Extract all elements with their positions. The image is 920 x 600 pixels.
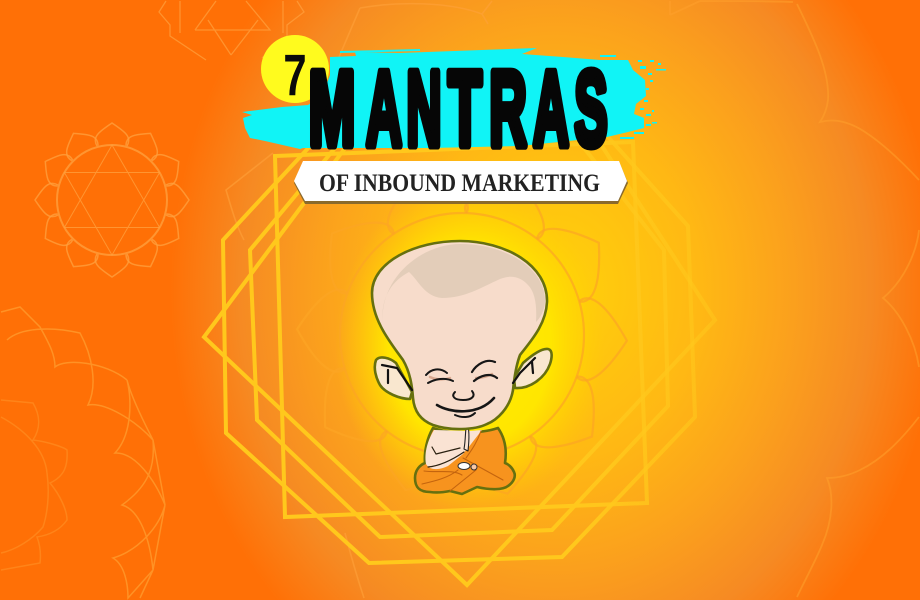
title brush stroke [242,48,666,149]
monk face [426,361,497,417]
background: large lotus lower left [1,307,165,598]
monk character [372,241,552,494]
monk head [372,241,547,429]
title MANTRAS: S [574,49,608,168]
scalp shading [382,244,545,325]
title MANTRAS: N [406,50,442,168]
central glow [335,180,605,510]
title MANTRAS: M [309,49,355,167]
background: chakra mandala left [35,123,189,277]
background: chakra mandala top [159,1,304,60]
badge circle with number 7: 7 [283,42,307,108]
badge circle with number 7 [261,35,329,108]
title MANTRAS: A [533,49,569,168]
monk right ear [514,349,552,388]
monk robe and legs [415,423,515,494]
title MANTRAS: A [366,49,402,168]
title MANTRAS: T [448,50,482,168]
background: large faint lotus right [670,1,919,597]
subtitle ribbon [294,161,628,204]
central lotus mandala [296,165,628,505]
subtitle ribbon: OF INBOUND MARKETING [319,170,600,197]
title MANTRAS [309,48,608,168]
background: faint lotus top and left fragments [226,1,492,598]
geometric yellow frames [204,120,715,585]
monk left ear [375,357,412,399]
ear inner lines [382,358,535,390]
title MANTRAS: R [489,48,527,168]
